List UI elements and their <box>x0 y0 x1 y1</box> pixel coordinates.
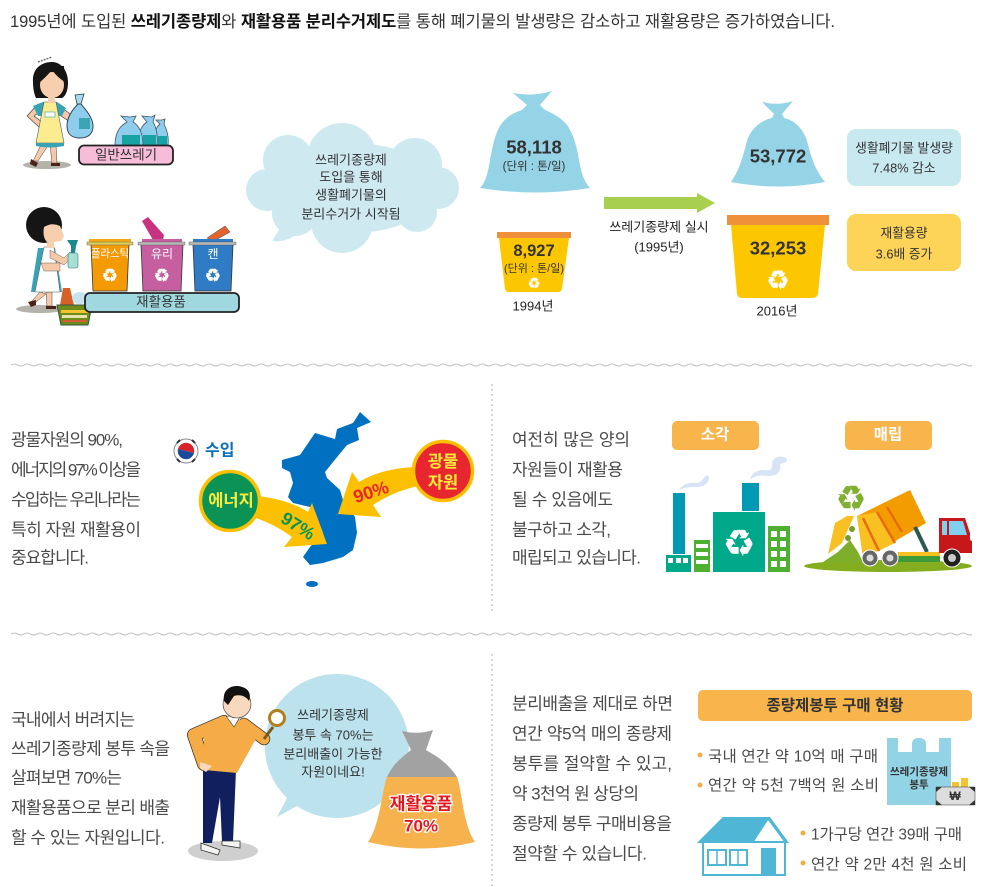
cloud callout: 분리수거가 시작됨 <box>301 206 401 222</box>
recycling bin: glass <box>138 217 185 291</box>
bullets: household purchase: 연간 약 2만 4천 원 소비 <box>811 856 967 874</box>
text: savings from proper sorting: 연간 약5억 매의 종량제 <box>512 724 672 744</box>
illustration: woman with general waste <box>23 57 93 169</box>
cloud callout <box>246 123 459 253</box>
icon: volume bag with money: 쓰레기종량제 <box>890 765 948 778</box>
recycling bin 2016: ♻ <box>766 266 790 296</box>
text: savings from proper sorting: 약 3천억 원 상당의 <box>512 784 639 804</box>
recycling bin: can: 캔 <box>207 247 219 261</box>
text: resource imports <box>11 430 141 568</box>
text: resource imports: 광물자원의 90%, <box>11 430 123 450</box>
speech bubble: 봉투 속 70%는 <box>292 728 374 742</box>
recycling bin: glass: 유리 <box>151 247 173 261</box>
text: savings from proper sorting: 종량제 봉투 구매비용을 <box>512 814 672 834</box>
bullets: national purchase: 국내 연간 약 10억 매 구매 <box>708 748 878 766</box>
recycling bin 1994 <box>497 232 571 292</box>
text: savings from proper sorting: 분리배출을 제대로 하면 <box>512 694 673 714</box>
bullets: household purchase <box>800 826 967 874</box>
icon: house <box>697 817 789 875</box>
recycling bin: can <box>189 226 236 291</box>
label: import: 수입 <box>205 442 234 460</box>
text: 70% of bags are recyclable: 쓰레기종량제 봉투 속을 <box>11 740 170 758</box>
icon: volume bag with money <box>887 738 975 805</box>
stat box: recycling increase: 재활용량 <box>880 226 928 240</box>
recycling bin: plastic <box>87 239 133 291</box>
cloud callout: 생활폐기물의 <box>315 188 387 202</box>
text: savings from proper sorting: 봉투를 절약할 수 있고, <box>512 754 672 774</box>
stat box: waste reduction: 7.48% 감소 <box>872 160 936 176</box>
icon: incineration plant <box>666 457 790 572</box>
arrow caption: (1995년) <box>634 240 684 254</box>
year label 1994: 1994년 <box>513 298 553 314</box>
green arrow <box>604 193 715 213</box>
arrow: minerals 90% <box>338 467 418 517</box>
recycling bin: plastic: 플라스틱 <box>91 247 129 260</box>
icon: landfill dump truck <box>804 479 972 572</box>
recycling bin 1994: (단위 : 톤/일) <box>504 261 564 275</box>
text: savings from proper sorting: 절약할 수 있습니다. <box>512 844 647 864</box>
text: still incinerated and landfilled: 불구하고 소각, <box>512 520 611 540</box>
map of Korea <box>282 412 371 587</box>
text: still incinerated and landfilled: 될 수 있음에도 <box>512 490 613 510</box>
text: 70% of bags are recyclable: 할 수 있는 자원입니다. <box>11 828 165 848</box>
recycling bin: glass: ♻ <box>154 266 170 286</box>
bag: 70% recyclable: 재활용품 <box>390 794 452 814</box>
icon: Korean flag <box>174 439 198 463</box>
speech bubble: 분리배출이 가능한 <box>283 746 383 762</box>
recycling bin 2016: 32,253 <box>750 238 806 258</box>
waste bag 1994: (단위 : 톤/일) <box>503 159 566 173</box>
waste bag 2016 <box>731 101 825 186</box>
bullets: national purchase <box>698 748 879 794</box>
arrow caption: 쓰레기종량제 실시 <box>609 220 709 234</box>
text: 70% of bags are recyclable: 재활용품으로 분리 배출 <box>11 798 170 818</box>
recycling bin 1994: ♻ <box>528 276 540 292</box>
text: still incinerated and landfilled: 여전히 많은 양의 <box>512 430 630 450</box>
circle: minerals <box>414 442 472 500</box>
tag: incineration: 소각 <box>701 426 729 444</box>
waste bag 1994: 58,118 <box>506 136 562 158</box>
arrow: energy 97%: 97% <box>277 508 319 544</box>
text: still incinerated and landfilled: 자원들이 재활용 <box>512 460 623 480</box>
illustration: woman sorting recyclables <box>16 207 78 313</box>
icon: incineration plant: ♻ <box>723 524 755 564</box>
stat box: waste reduction <box>847 129 961 186</box>
basket with recyclables <box>57 288 92 325</box>
heading: volume bag purchase status <box>698 690 972 721</box>
circle: energy <box>200 472 260 530</box>
circle: minerals: 광물 <box>428 452 458 471</box>
year label 2016: 2016년 <box>757 304 797 318</box>
recycling bin 2016 <box>727 215 829 298</box>
icon: general waste bags <box>115 115 168 145</box>
icon: volume bag with money: ₩ <box>949 789 961 803</box>
tag: landfill <box>845 421 932 450</box>
speech bubble <box>265 674 409 818</box>
stat box: recycling increase: 3.6배 증가 <box>876 246 933 262</box>
label: general waste <box>79 146 173 164</box>
recycling bin: can: ♻ <box>205 266 221 286</box>
illustration: man with magnifying glass <box>188 686 284 861</box>
text: resource imports: 중요합니다. <box>11 548 89 568</box>
bag: 70% recyclable: 70% <box>404 816 438 836</box>
text: resource imports: 수입하는 우리나라는 <box>11 490 141 510</box>
bullets: national purchase: 연간 약 5천 7백억 원 소비 <box>708 776 879 794</box>
arrow: minerals 90%: 90% <box>351 477 391 507</box>
stat box: recycling increase <box>847 214 961 271</box>
icon: landfill dump truck: ♻ <box>836 479 866 519</box>
recycling bin 1994: 8,927 <box>513 242 555 260</box>
text: 70% of bags are recyclable: 살펴보면 70%는 <box>11 768 122 788</box>
label: general waste: 일반쓰레기 <box>95 148 157 162</box>
waste bag 2016: 53,772 <box>750 146 806 166</box>
text: resource imports: 에너지의 97% 이상을 <box>11 460 141 480</box>
text: resource imports: 특히 자원 재활용이 <box>11 520 141 540</box>
cloud callout: 쓰레기종량제 <box>315 152 387 168</box>
speech bubble: 자원이네요! <box>301 764 365 780</box>
text: still incinerated and landfilled: 매립되고 있습니다. <box>512 548 641 568</box>
text: still incinerated and landfilled <box>512 430 641 568</box>
tag: landfill: 매립 <box>874 426 902 444</box>
cloud callout: 도입을 통해 <box>319 170 383 184</box>
intro heading: 1995년에 도입된 쓰레기종량제와 재활용품 분리수거제도를 통해 폐기물의 발생량은 감소하고 재활용량은 증가하였습니다. <box>10 12 835 31</box>
text: 70% of bags are recyclable: 국내에서 버려지는 <box>11 710 135 730</box>
arrow: energy 97% <box>256 496 327 547</box>
recycling bin: plastic: ♻ <box>102 266 118 286</box>
label: recyclables: 재활용품 <box>136 294 186 310</box>
waste bag 1994 <box>480 91 590 192</box>
bag: 70% recyclable <box>368 730 475 848</box>
arrow caption <box>609 220 709 254</box>
circle: minerals: 자원 <box>428 473 458 492</box>
icon: volume bag with money: 봉투 <box>909 779 929 791</box>
label: recyclables <box>85 293 239 312</box>
speech bubble: 쓰레기종량제 <box>297 708 369 722</box>
circle: energy: 에너지 <box>208 491 254 510</box>
tag: incineration <box>672 421 759 450</box>
bullets: household purchase: 1가구당 연간 39매 구매 <box>811 826 962 844</box>
stat box: waste reduction: 생활폐기물 발생량 <box>855 140 953 156</box>
text: 70% of bags are recyclable <box>11 710 170 848</box>
text: savings from proper sorting <box>512 694 673 864</box>
heading: volume bag purchase status: 종량제봉투 구매 현황 <box>767 696 903 714</box>
